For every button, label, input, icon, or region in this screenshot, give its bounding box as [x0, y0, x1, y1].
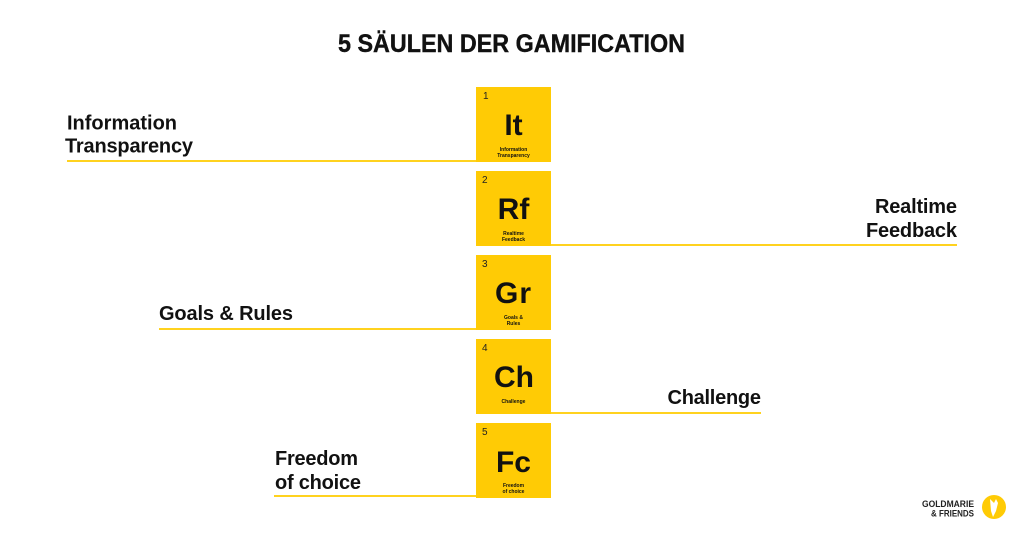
- element tile 1: It: Information: [500, 147, 527, 153]
- element tile 4: Ch: 4: [482, 343, 488, 354]
- element tile 5: Fc: 5: [482, 427, 488, 438]
- element tile 2: Rf: Realtime: [503, 231, 524, 237]
- element tile 5: Fc: Fc: [496, 446, 531, 479]
- title: 5 SÄULEN DER GAMIFICATION: [338, 30, 685, 58]
- callout: Realtime Feedback: Realtime: [875, 196, 957, 218]
- icon: yellow harp badge: [982, 495, 1006, 519]
- element tile 1: It: It: [504, 109, 523, 142]
- callout: Information Transparency: [65, 112, 476, 162]
- element tile 2: Rf: Rf: [498, 193, 530, 226]
- callout: Freedom of choice: [274, 448, 476, 497]
- element tile 3: Gr: Gr: [495, 277, 531, 310]
- element tile 1: It: [476, 87, 551, 162]
- element tile 4: Ch: [476, 339, 551, 414]
- callout: Information Transparency: Transparency: [65, 136, 194, 158]
- element tile 3: Gr: Goals &: [504, 315, 523, 321]
- element tile 5: Fc: of choice: [503, 489, 525, 495]
- callout: Information Transparency: Information: [67, 112, 177, 134]
- element tile 3: Gr: [476, 255, 551, 330]
- element tile 4: Ch: Ch: [494, 361, 534, 394]
- callout: Freedom of choice: of choice: [275, 472, 361, 494]
- element tile 5: Fc: Freedom: [503, 483, 525, 489]
- element tile 3: Gr: Rules: [507, 321, 521, 327]
- logo: Goldmarie & Friends: & FRIENDS: [931, 508, 974, 520]
- element tile 1: It: Transparency: [497, 153, 530, 159]
- logo: Goldmarie & Friends: GOLDMARIE: [922, 499, 974, 510]
- callout: Goals & Rules: Goals & Rules: [159, 303, 293, 325]
- element tile 2: Rf: [476, 171, 551, 246]
- element tile 1: It: 1: [483, 91, 489, 102]
- callout: Challenge: Challenge: [668, 387, 761, 409]
- element tile 2: Rf: Feedback: [502, 237, 525, 243]
- element tile 5: Fc: [476, 423, 551, 498]
- element tile 3: Gr: 3: [482, 259, 488, 270]
- callout: Realtime Feedback: [551, 196, 958, 246]
- element tile 2: Rf: 2: [482, 175, 488, 186]
- callout: Freedom of choice: Freedom: [275, 448, 358, 470]
- logo: Goldmarie & Friends: [922, 495, 1006, 520]
- element tile 4: Ch: Challenge: [502, 399, 526, 405]
- callout: Realtime Feedback: Feedback: [866, 220, 958, 242]
